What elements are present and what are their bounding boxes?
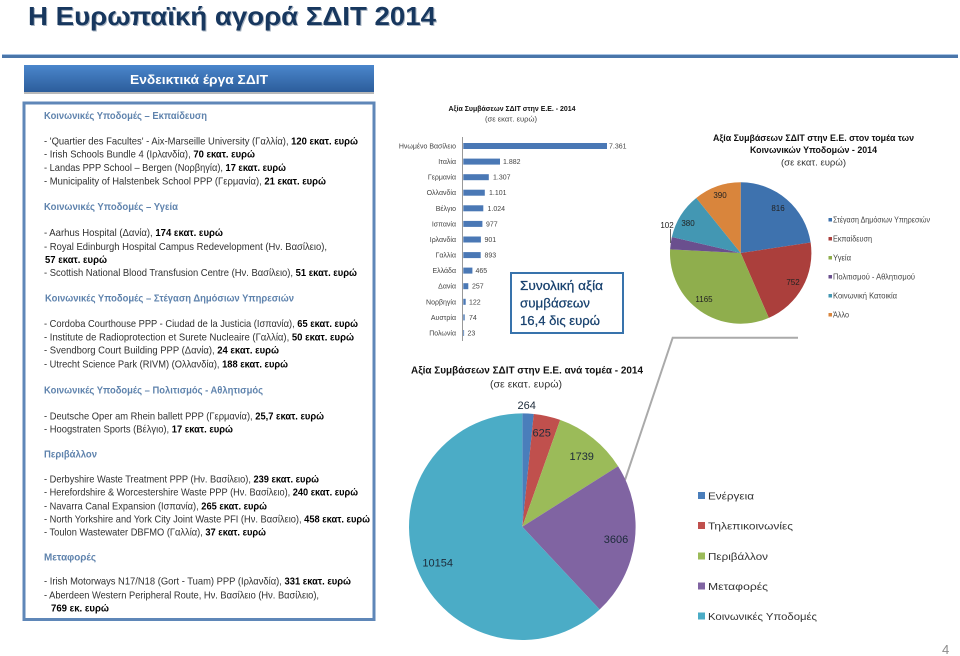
text block: health projects: 57 εκατ. ευρώ: [45, 254, 107, 266]
legend: value by sector pie: Κοινωνικές Υποδομές: [708, 611, 817, 623]
chart title: value by sector pie: Αξία Συμβάσεων ΣΔΙΤ στην Ε.Ε. ανά τομέα - 2014: [411, 364, 643, 376]
chart title: social infrastructure pie: [713, 133, 914, 168]
pie chart: value by sector: 1739: [569, 451, 594, 463]
connector line between pies: [625, 338, 798, 480]
chart title: value by sector pie: (σε εκατ. ευρώ): [490, 378, 562, 390]
legend: value by sector pie: [698, 490, 817, 623]
value labels: 1.307: [493, 175, 511, 182]
value labels: 1.101: [489, 190, 507, 197]
country labels: Αυστρία: [431, 314, 456, 322]
chart title: value by sector pie: [411, 364, 643, 390]
heading: public buildings: Κοινωνικές Υποδομές – Στέγαση Δημόσιων Υπηρεσιών: [45, 292, 294, 304]
legend: value by sector pie: Μεταφορές: [708, 581, 768, 593]
value labels: 465: [476, 268, 487, 275]
pie chart: value by sector: 10154: [422, 558, 453, 570]
value labels: 893: [484, 253, 496, 260]
text block: transport projects: 769 εκ. ευρώ: [51, 602, 109, 614]
legend: social infrastructure pie: Κοινωνική Κατοικία: [833, 292, 897, 300]
pie chart: social infrastructure: 1165: [695, 295, 713, 304]
legend: value by sector pie: Ενέργεια: [708, 490, 754, 502]
text block: health projects: - Royal Edinburgh Hospital Campus Redevelopment (Ην. Βασίλειο),: [44, 241, 327, 253]
value labels: 23: [468, 330, 475, 338]
text block: education projects: [44, 136, 358, 188]
heading: environment: Περιβάλλον: [44, 448, 97, 460]
text block: education projects: - Landas PPP School – Bergen (Νορβηγία), 17 εκατ. ευρώ: [44, 162, 286, 174]
pie chart: social infrastructure: 102: [660, 221, 674, 230]
title: Η Ευρωπαϊκή αγορά ΣΔΙΤ 2014: [29, 2, 438, 32]
text block: transport projects: - Irish Motorways N17/N18 (Gort - Tuam) PPP (Ιρλανδία), 331 εκατ. ευρώ: [44, 576, 351, 588]
country labels: Βέλγιο: [436, 205, 456, 213]
country labels: Γερμανία: [428, 174, 456, 182]
text block: public building projects: - Cordoba Courthouse PPP - Ciudad de la Justicia (Ισπανία), 65 εκατ. ευρώ: [44, 318, 358, 330]
country labels: Γαλλία: [435, 252, 456, 260]
heading: education: Κοινωνικές Υποδομές – Εκπαίδευση: [44, 110, 207, 122]
bar chart title: (σε εκατ. ευρώ): [485, 114, 538, 124]
country labels: Ηνωμένο Βασίλειο: [399, 142, 456, 150]
value labels: 7.361: [609, 144, 627, 150]
value labels: 74: [469, 315, 477, 322]
heading: health: Κοινωνικές Υποδομές – Υγεία: [44, 201, 178, 213]
text block: transport projects: - Aberdeen Western Peripheral Route, Ην. Βασίλειο (Ην. Βασίλειο),: [44, 590, 319, 602]
legend: social infrastructure pie: Πολιτισμού - Αθλητισμού: [833, 272, 915, 282]
callout: total contract value: [511, 273, 623, 333]
value labels: 1.882: [503, 159, 521, 166]
country labels: Ολλανδία: [427, 189, 456, 197]
text block: culture and sports projects: [44, 410, 324, 436]
bars: [463, 143, 607, 336]
text block: environment projects: - Navarra Canal Expansion (Ισπανία), 265 εκατ. ευρώ: [44, 500, 267, 512]
legend: value by sector pie: Περιβάλλον: [708, 551, 768, 563]
text block: environment projects: - Toulon Wastewater DBFMO (Γαλλία), 37 εκατ. ευρώ: [44, 526, 266, 538]
text block: public building projects: [44, 318, 358, 370]
country labels: Ιταλία: [438, 158, 456, 166]
legend: social infrastructure pie: Στέγαση Δημόσιων Υπηρεσιών: [833, 216, 930, 224]
text block: education projects: - 'Quartier des Facultes' - Aix-Marseille University (Γαλλία), 120 εκατ. ευρώ: [44, 136, 358, 148]
title: Η Ευρωπαϊκή αγορά ΣΔΙΤ 2014: [28, 1, 437, 31]
text block: transport projects: [44, 576, 351, 614]
text block: health projects: [44, 227, 357, 279]
value labels: 122: [469, 299, 481, 306]
text block: public building projects: - Svendborg Court Building PPP (Δανία), 24 εκατ. ευρώ: [44, 344, 279, 356]
legend: social infrastructure pie: Εκπαίδευση: [833, 234, 872, 244]
country labels: Ισπανία: [432, 220, 456, 228]
text block: public building projects: - Institute de Radioprotection et Surete Nucleaire (Γαλλία), 50 εκατ. ευρώ: [44, 332, 354, 344]
legend: social infrastructure pie: Άλλο: [833, 310, 849, 320]
chart title: social infrastructure pie: Αξία Συμβάσεων ΣΔΙΤ στην Ε.Ε. στον τομέα των: [713, 133, 914, 144]
country labels: Νορβηγία: [426, 298, 456, 306]
text block: education projects: - Municipality of Halstenbek School PPP (Γερμανία), 21 εκατ. ευρώ: [44, 176, 326, 188]
pie chart: social infrastructure: 752: [786, 278, 800, 287]
value labels: 901: [484, 237, 496, 244]
callout: total contract value: Συνολική αξία: [520, 278, 603, 293]
country labels: Πολωνία: [429, 330, 456, 338]
header bar: indicative projects: [24, 65, 374, 94]
pie chart: value by sector: 625: [533, 428, 551, 440]
pie chart: social infrastructure: 816: [771, 204, 785, 213]
header bar: indicative projects: Ενδεικτικά έργα ΣΔΙΤ: [130, 72, 268, 87]
legend: social infrastructure pie: Υγεία: [833, 254, 851, 262]
legend: social infrastructure pie: [828, 216, 930, 320]
value labels: [468, 144, 627, 338]
country labels: Δανία: [438, 283, 456, 291]
pie chart: social infrastructure: 390: [713, 191, 727, 200]
text block: environment projects: - Herefordshire & Worcestershire Waste PPP (Ην. Βασίλειο), 240 εκατ. ευρώ: [44, 486, 358, 498]
heading: transport: Μεταφορές: [44, 552, 97, 564]
chart title: social infrastructure pie: (σε εκατ. ευρώ): [781, 158, 846, 168]
country labels: [399, 142, 456, 338]
pie chart: social infrastructure: 380: [681, 219, 695, 228]
value labels: 1.024: [488, 206, 505, 213]
bar chart title: [448, 104, 576, 124]
text block: environment projects: [44, 474, 370, 538]
panel: indicative projects list: [24, 103, 374, 620]
callout: total contract value: συμβάσεων: [520, 296, 590, 310]
pie chart: social infrastructure: [660, 182, 811, 324]
text block: environment projects: - Derbyshire Waste Treatment PPP (Ην. Βασίλειο), 239 εκατ. ευρώ: [44, 474, 319, 486]
chart title: social infrastructure pie: Κοινωνικών Υποδομών - 2014: [750, 145, 878, 156]
pie chart: value by sector: 3606: [604, 534, 628, 546]
text block: environment projects: - North Yorkshire and York City Joint Waste PFI (Ην. Βασίλειο), 458 εκατ. ευρώ: [44, 514, 370, 526]
text block: education projects: - Irish Schools Bundle 4 (Ιρλανδία), 70 εκατ. ευρώ: [44, 148, 255, 160]
country labels: Ελλάδα: [432, 267, 456, 275]
legend: value by sector pie: Τηλεπικοινωνίες: [708, 520, 793, 532]
value labels: 257: [472, 284, 484, 291]
country labels: Ιρλανδία: [430, 236, 456, 244]
value labels: 977: [486, 221, 498, 228]
pie chart: value by sector: 264: [518, 400, 536, 412]
callout: total contract value: 16,4 δις ευρώ: [520, 313, 600, 328]
pie chart: value by sector: [409, 400, 636, 640]
text block: health projects: - Aarhus Hospital (Δανία), 174 εκατ. ευρώ: [44, 227, 223, 239]
bar chart: contract value by country: [399, 104, 627, 341]
text block: health projects: - Scottish National Blood Transfusion Centre (Ην. Βασίλειο), 51 εκατ. ευρώ: [44, 267, 357, 279]
text block: culture and sports projects: - Deutsche Oper am Rhein ballett PPP (Γερμανία), 25,7 εκατ. ευρώ: [44, 410, 324, 422]
bar chart title: Αξία Συμβάσεων ΣΔΙΤ στην Ε.Ε. - 2014: [448, 104, 576, 113]
text block: culture and sports projects: - Hoogstraten Sports (Βέλγιο), 17 εκατ. ευρώ: [44, 424, 233, 436]
text block: public building projects: - Utrecht Science Park (RIVM) (Ολλανδία), 188 εκατ. ευρώ: [44, 358, 288, 370]
heading: culture and sports: Κοινωνικές Υποδομές – Πολιτισμός - Αθλητισμός: [44, 384, 263, 396]
